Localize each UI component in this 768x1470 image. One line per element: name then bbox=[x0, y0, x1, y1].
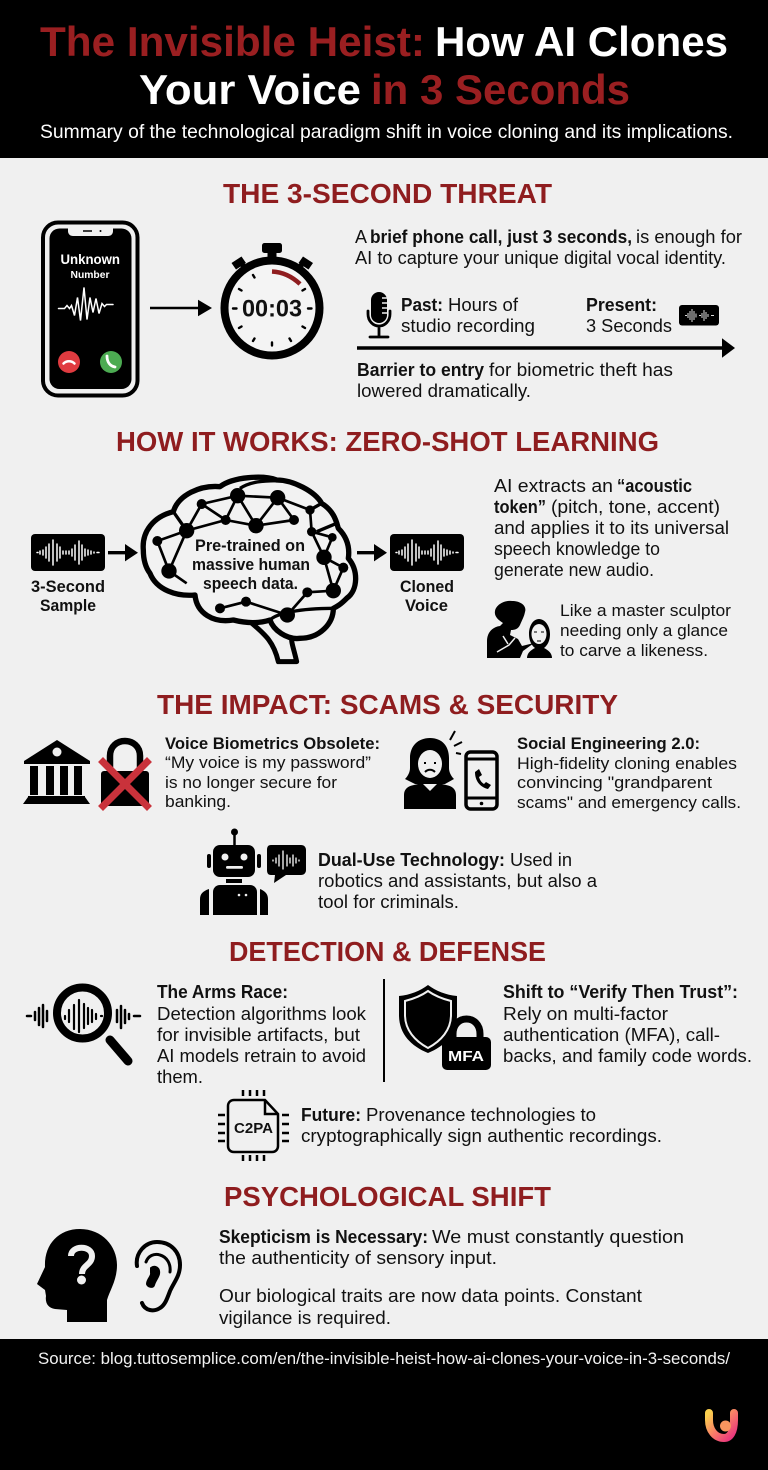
text: skepticism is necessary: We must constantly question bbox=[432, 1227, 684, 1247]
text: social engineering: High-fidelity cloning enables bbox=[517, 754, 737, 773]
text: master sculptor: needing only a glance bbox=[560, 621, 728, 640]
heading: detection and defense: DETECTION & DEFENSE bbox=[229, 936, 546, 967]
text: dual-use technology: robotics and assistants, but also a bbox=[318, 871, 598, 891]
text: the arms race: for invisible artifacts, but bbox=[157, 1025, 360, 1045]
text: future provenance bbox=[301, 1105, 662, 1146]
text: past bbox=[401, 295, 535, 336]
text: barrier to entry: Barrier to entry bbox=[357, 360, 484, 380]
text: dual-use technology: Used in bbox=[510, 850, 572, 870]
text: barrier to entry bbox=[357, 360, 673, 401]
text: past: Hours of bbox=[448, 295, 519, 315]
panel: psychological shift bbox=[37, 1227, 684, 1328]
icon: worried woman and phone bbox=[404, 731, 497, 809]
panel: detection and defense bbox=[27, 979, 752, 1161]
text: the arms race: AI models retrain to avoid bbox=[157, 1046, 366, 1066]
icon: cloned waveform bbox=[390, 534, 464, 571]
icon: shield and MFA lock: MFA bbox=[448, 1048, 484, 1065]
text: present bbox=[586, 295, 672, 336]
title: How AI Clones bbox=[435, 18, 728, 65]
title: in 3 Seconds bbox=[371, 66, 630, 113]
subtitle: Summary of the technological paradigm shift in voice cloning and its implications. bbox=[40, 121, 733, 143]
text: present: Present: bbox=[586, 295, 657, 315]
icon: sculptor and likeness bbox=[487, 601, 552, 658]
text: the arms race: The Arms Race: bbox=[157, 982, 288, 1002]
text: master sculptor: Like a master sculptor bbox=[560, 601, 731, 620]
panel: the impact bbox=[23, 731, 741, 915]
icon: C2PA chip: C2PA bbox=[234, 1121, 274, 1137]
text: brief phone call: is enough for bbox=[636, 227, 742, 247]
text: verify then trust: Rely on multi-factor bbox=[503, 1004, 668, 1024]
text: verify then trust: backs, and family code words. bbox=[503, 1046, 752, 1066]
label: cloned voice: Cloned bbox=[400, 578, 454, 596]
icon: head with question mark bbox=[37, 1229, 117, 1322]
label: 3-second sample bbox=[31, 578, 105, 615]
text: future provenance: Future: bbox=[301, 1105, 361, 1125]
text: acoustic token: AI extracts an bbox=[494, 476, 613, 496]
source line: Source: blog.tuttosemplice.com/en/the-invisible-heist-how-ai-clones-your-voice-in-3-seconds/ bbox=[38, 1349, 730, 1368]
text: past: studio recording bbox=[401, 316, 535, 336]
icon: ear bbox=[137, 1242, 180, 1310]
text: acoustic token bbox=[494, 476, 729, 580]
heading: the impact: THE IMPACT: SCAMS & SECURITY bbox=[157, 689, 618, 720]
icon: magnifier over waveform bbox=[27, 988, 140, 1061]
text: biological traits bbox=[219, 1286, 642, 1328]
text: dual-use technology bbox=[318, 850, 598, 912]
arrow: timeline bbox=[357, 338, 735, 358]
label: cloned voice: Voice bbox=[405, 597, 448, 615]
text: voice biometrics obsolete: is no longer secure for bbox=[165, 773, 337, 792]
text: the arms race bbox=[157, 982, 367, 1087]
text: voice biometrics obsolete bbox=[165, 734, 380, 811]
text: verify then trust: Shift to “Verify Then Trust”: bbox=[503, 982, 738, 1002]
text: brief phone call bbox=[355, 227, 742, 268]
icon: input waveform bbox=[31, 534, 105, 571]
text: acoustic token: generate new audio. bbox=[494, 560, 654, 580]
text: master sculptor bbox=[560, 601, 731, 660]
panel: how it works bbox=[31, 476, 731, 662]
text: acoustic token: token” bbox=[494, 497, 546, 517]
icon: logo bbox=[709, 1413, 734, 1438]
footer band bbox=[0, 1339, 768, 1470]
icon: bank and crossed lock bbox=[23, 740, 149, 806]
text: dual-use technology: Dual-Use Technology: bbox=[318, 850, 505, 870]
icon: stopwatch 00:03: 00:03 bbox=[242, 296, 302, 322]
heading: psychological shift: PSYCHOLOGICAL SHIFT bbox=[224, 1181, 551, 1212]
text: biological traits: Our biological traits are now data points. Constant bbox=[219, 1286, 642, 1306]
text: brief phone call: A bbox=[355, 227, 367, 247]
icon: brain neural network bbox=[143, 477, 356, 662]
text: skepticism is necessary: Skepticism is Necessary: bbox=[219, 1227, 428, 1247]
arrow: brain to cloned voice bbox=[357, 544, 387, 561]
text: acoustic token: “acoustic bbox=[617, 476, 692, 496]
title: Your Voice bbox=[139, 66, 361, 113]
text: the arms race: Detection algorithms look bbox=[157, 1004, 367, 1024]
icon: shield and MFA lock bbox=[399, 985, 491, 1070]
text: the arms race: them. bbox=[157, 1067, 203, 1087]
text: social engineering: convincing "grandparent bbox=[517, 773, 712, 792]
text: voice biometrics obsolete: Voice Biometrics Obsolete: bbox=[165, 734, 380, 753]
icon: phone with unknown caller bbox=[43, 222, 138, 396]
text: brief phone call: brief phone call, just 3 seconds, bbox=[370, 227, 632, 247]
arrow: sample to brain bbox=[108, 544, 138, 561]
text: past: Past: bbox=[401, 295, 443, 315]
text: barrier to entry: for biometric theft has bbox=[489, 360, 673, 380]
text: acoustic token: speech knowledge to bbox=[494, 539, 660, 559]
label: cloned voice bbox=[400, 578, 454, 615]
arrow: phone to stopwatch bbox=[150, 300, 212, 316]
text: social engineering: Social Engineering 2.0: bbox=[517, 734, 700, 753]
text: acoustic token: (pitch, tone, accent) bbox=[551, 497, 720, 517]
text: acoustic token: and applies it to its universal bbox=[494, 518, 729, 538]
text: present: 3 Seconds bbox=[586, 316, 672, 336]
text: dual-use technology: tool for criminals. bbox=[318, 892, 459, 912]
icon: stopwatch 00:03 bbox=[224, 243, 320, 356]
text: pre-trained on speech data: Pre-trained on bbox=[195, 537, 305, 555]
text: biological traits: vigilance is required. bbox=[219, 1308, 391, 1328]
header band bbox=[0, 0, 768, 158]
text: pre-trained on speech data: speech data. bbox=[203, 575, 298, 593]
heading: the 3-second threat: THE 3-SECOND THREAT bbox=[223, 178, 552, 209]
text: social engineering bbox=[517, 734, 741, 812]
text: pre-trained on speech data bbox=[192, 537, 310, 593]
text: skepticism is necessary: the authenticity of sensory input. bbox=[219, 1248, 497, 1268]
icon: robot with speech bubble bbox=[200, 828, 306, 915]
title bbox=[40, 18, 728, 113]
label: 3-second sample: Sample bbox=[40, 597, 96, 615]
text: future provenance: cryptographically sign authentic recordings. bbox=[301, 1126, 662, 1146]
icon: C2PA chip bbox=[218, 1090, 289, 1161]
text: master sculptor: to carve a likeness. bbox=[560, 641, 708, 660]
text: social engineering: scams" and emergency calls. bbox=[517, 793, 741, 812]
panel: 3-second threat bbox=[43, 222, 742, 401]
text: voice biometrics obsolete: banking. bbox=[165, 792, 231, 811]
icon: phone with unknown caller: Unknown bbox=[60, 251, 120, 267]
label: 3-second sample: 3-Second bbox=[31, 578, 105, 596]
text: barrier to entry: lowered dramatically. bbox=[357, 381, 531, 401]
text: verify then trust bbox=[503, 982, 752, 1066]
text: voice biometrics obsolete: “My voice is my password” bbox=[165, 753, 371, 772]
icon: small waveform bbox=[679, 305, 719, 326]
text: skepticism is necessary bbox=[219, 1227, 684, 1268]
icon: microphone bbox=[368, 292, 390, 337]
icon: phone with unknown caller: Number bbox=[70, 270, 110, 281]
title: The Invisible Heist: bbox=[40, 18, 425, 65]
text: pre-trained on speech data: massive human bbox=[192, 556, 310, 574]
text: future provenance: Provenance technologies to bbox=[366, 1105, 596, 1125]
text: verify then trust: authentication (MFA), call- bbox=[503, 1025, 720, 1045]
heading: how it works: HOW IT WORKS: ZERO-SHOT LEARNING bbox=[116, 426, 659, 457]
text: brief phone call: AI to capture your unique digital vocal identity. bbox=[355, 248, 726, 268]
